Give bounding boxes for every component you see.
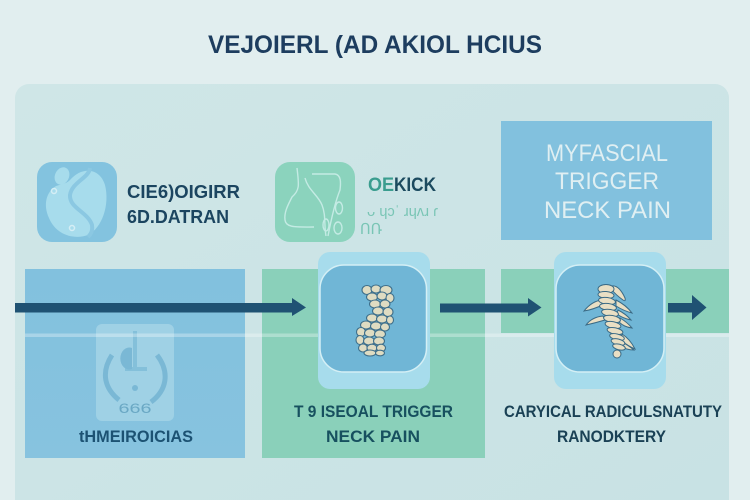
panel: myofascial heading box bbox=[501, 121, 712, 240]
icon: vertebrae column bbox=[356, 285, 394, 356]
arrow: right arrow bbox=[668, 295, 706, 320]
text: right caption bbox=[504, 402, 723, 446]
card: cervical spine right bbox=[554, 252, 666, 389]
panel: main background bbox=[15, 84, 729, 500]
text: right caption: RANODKTERY bbox=[557, 427, 667, 446]
icon: body figure card: 666 bbox=[118, 400, 152, 416]
panel: myofascial heading box: TRIGGER bbox=[555, 168, 659, 195]
arrow: centre-right arrow bbox=[440, 298, 542, 316]
divider highlight bbox=[25, 334, 729, 337]
text: right caption: CARYICAL RADICULSNATUTY bbox=[504, 402, 723, 421]
text: left icon label bbox=[127, 182, 240, 227]
panel: centre green block bbox=[262, 269, 485, 458]
icon: neck anatomy card centre bbox=[275, 162, 355, 242]
panel: myofascial heading box: MYFASCIAL bbox=[546, 140, 668, 167]
icon: neck anatomy card left bbox=[37, 162, 117, 242]
text: centre icon label: KICK bbox=[394, 175, 436, 196]
text: centre icon label: OE bbox=[368, 175, 394, 196]
icon: spine with ribs bbox=[584, 284, 635, 358]
label: centre block caption: T 9 ISEOAL TRIGGER bbox=[294, 402, 453, 421]
panel: left blue block bbox=[25, 269, 245, 458]
panel: myofascial heading box: NECK PAIN bbox=[544, 197, 671, 224]
card: cervical spine centre bbox=[318, 252, 430, 389]
panel: right green band bbox=[501, 269, 729, 333]
text: centre icon label: ՈՌ bbox=[360, 221, 382, 238]
text: left icon label: CIE6)OIGIRR bbox=[127, 182, 240, 202]
arrow: long left arrow bbox=[15, 298, 306, 316]
label: centre block caption bbox=[294, 402, 453, 446]
text: centre icon label: ᴗ ɥɔˈ ɹɥʌɹ ɾ bbox=[367, 203, 438, 220]
label: left block caption: tHMEIROICIAS bbox=[79, 428, 193, 446]
text: left icon label: 6D.DATRAN bbox=[127, 207, 229, 227]
label: centre block caption: NECK PAIN bbox=[326, 427, 420, 446]
text: centre icon label bbox=[360, 175, 438, 238]
title: VEJOIERL (AD AKIOL HCIUS bbox=[208, 31, 542, 59]
icon: body figure card bbox=[96, 324, 174, 421]
